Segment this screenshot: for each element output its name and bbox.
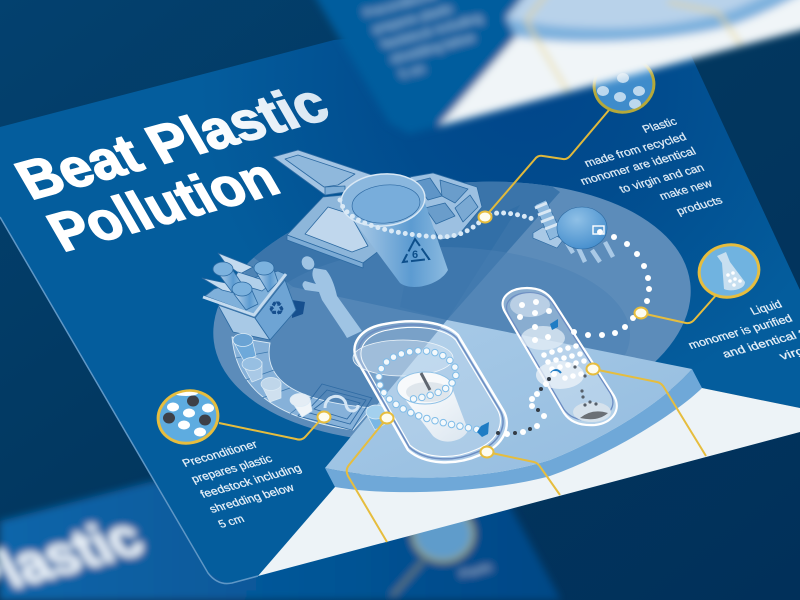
platform side [325,369,702,492]
text: liquid monomer: and identical to [720,326,800,361]
text: liquid monomer: Liquid [748,299,784,318]
text: liquid monomer: monomer is purified [686,313,795,352]
reactor [533,200,613,262]
white corner [258,388,800,576]
connector nodes [318,212,648,458]
text: plastic: make new [657,178,715,203]
connector: liquid monomer [641,293,718,323]
blurred card: top copy: shredding below [388,32,478,66]
callout icon: liquid monomer flask [694,239,764,303]
blurred card: top copy [181,0,800,134]
clamshell container [273,150,380,268]
small cups on conveyor [233,334,387,430]
platform top [325,320,692,478]
large recycled cup [339,170,448,287]
bead chain: polymer ring [379,351,485,431]
floor disc [213,182,691,438]
text: preconditioner: prepares plastic [189,453,275,486]
connector: plastic [485,110,609,217]
dots: capsule link [496,371,557,437]
cast shadow of bin [292,300,305,318]
conveyor floor [232,337,372,430]
bead chain: top link [340,200,533,237]
text: preconditioner: shredding below [207,482,297,516]
text: plastic [578,116,725,218]
blurred card: top copy: 5 cm [397,64,428,81]
plastic tray [410,173,482,240]
text: plastic: products [674,195,725,218]
callout icon: preconditioner molecules [156,389,220,445]
blurred card: top copy: prepares plastic [370,3,456,36]
text: plastic: made from recycled [582,132,689,170]
tube contents [510,293,611,422]
icon: catalyst piece [477,422,489,437]
text: preconditioner [180,439,304,531]
blurred card: bottom copy [0,452,561,600]
capsule: pretreatment [354,321,507,462]
blurred card: bottom copy: Plastic [457,561,496,581]
text: preconditioner: 5 cm [216,514,247,531]
blurred card: top copy: feedstock including [379,13,485,51]
text: preconditioner: Preconditioner [180,439,260,470]
connector: capsule to base [347,418,387,542]
title [5,73,340,263]
connector: tube to base [593,369,706,456]
text: preconditioner: feedstock including [198,463,304,501]
capsule: reactor tube [503,288,617,425]
grid mat [298,384,372,430]
white cup in capsule [353,340,468,442]
text: liquid monomer [686,299,800,363]
text: plastic: Plastic [640,116,680,136]
icon: recycling code 6: 6 [412,249,418,261]
dots: reactor to monomer purification [571,229,652,338]
title: Pollution [37,148,290,263]
text: plastic: to virgin and can [617,162,706,196]
icon: recycling mark: ♻ [268,299,285,320]
callout icon: plastic molecules [592,64,656,114]
person silhouette [299,254,362,338]
card left edge highlight [0,217,258,584]
title: Beat Plastic [5,73,340,211]
connector: preconditioner [219,417,323,440]
text: plastic: monomer are identical [578,146,698,188]
recycling bin with cups [202,253,296,340]
connector: capsule link to base [487,452,560,495]
